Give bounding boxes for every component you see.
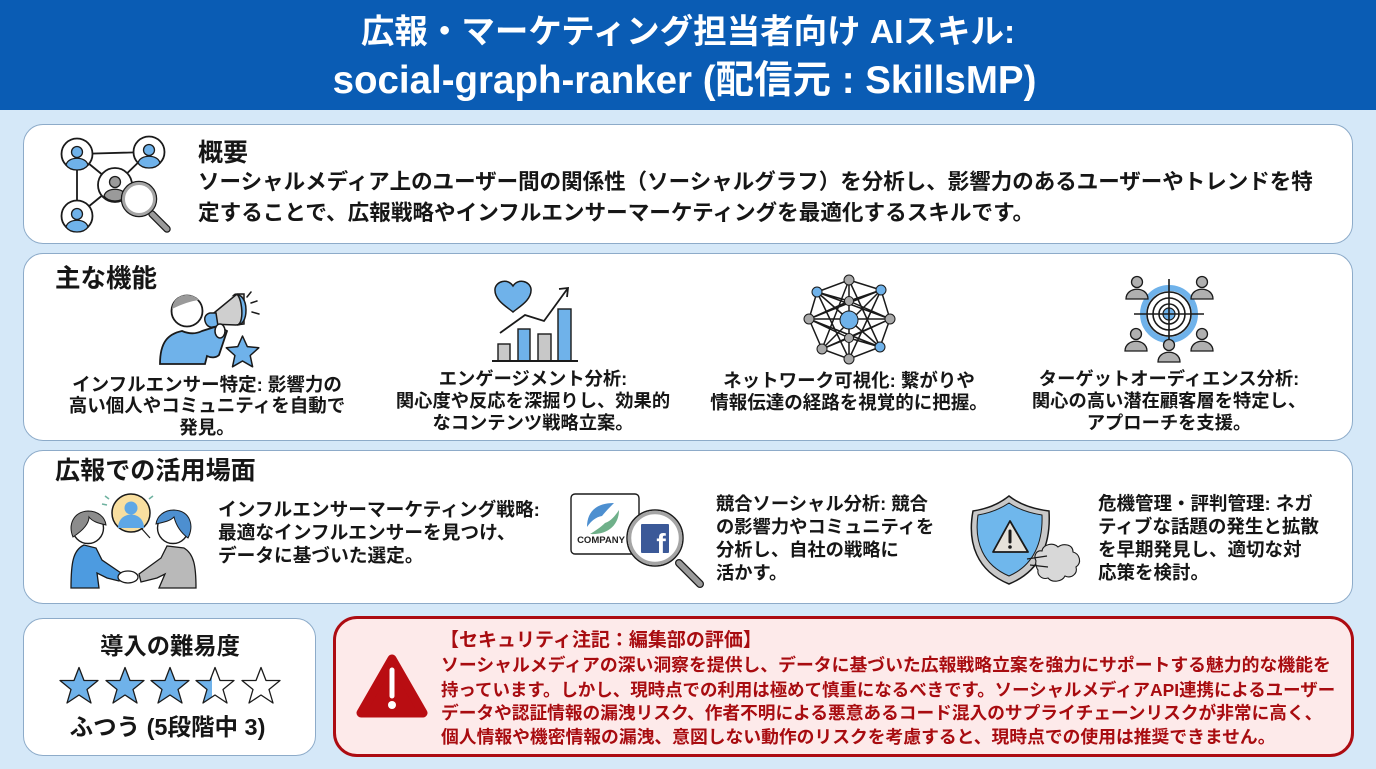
overview heading: 概要 [198, 139, 248, 167]
use case text: influencer strategy: 最適なインフルエンサーを見つけ、 [218, 522, 516, 543]
feature text: influencer identification: インフルエンサー特定: 影響力の [72, 374, 342, 395]
panel: main features [23, 253, 1353, 441]
feature text: influencer identification: 高い個人やコミュニティを自動で [69, 395, 345, 416]
difficulty heading: 導入の難易度 [100, 633, 240, 659]
use case text: influencer strategy [218, 499, 540, 566]
feature text: target audience analysis: ターゲットオーディエンス分析: [1039, 368, 1299, 389]
feature text: influencer identification [69, 374, 345, 438]
feature text: target audience analysis: 関心の高い潜在顧客層を特定し、 [1032, 390, 1306, 411]
feature text: network visualization: ネットワーク可視化: 繋がりや [723, 370, 975, 391]
warning body text: 個人情報や機密情報の漏洩、意図しない動作のリスクを考慮すると、現時点での使用は推奨できません。 [441, 727, 1275, 747]
warning heading: 【セキュリティ注記：編集部の評価】 [440, 630, 762, 651]
use case text: competitor social analysis: の影響力やコミュニティを [716, 516, 934, 537]
use case text: competitor social analysis: 活かす。 [716, 562, 787, 583]
overview text: ソーシャルメディア上のユーザー間の関係性（ソーシャルグラフ）を分析し、影響力のあるユーザーやトレンドを特 [198, 170, 1313, 194]
feature text: engagement analysis [396, 368, 670, 433]
warning body text [441, 655, 1335, 747]
icon: competitor analysis magnifier: COMPANY [577, 535, 626, 546]
warning body text: データや認証情報の漏洩リスク、作者不明による悪意あるコード混入のサプライチェーンリスクが非常に高く、 [441, 703, 1322, 723]
warning body text: 持っています。しかし、現時点での利用は極めて慎重になるべきです。ソーシャルメディアAPI連携によるユーザー [441, 680, 1335, 700]
feature text: engagement analysis: なコンテンツ戦略立案。 [432, 412, 634, 433]
feature text: target audience analysis [1032, 368, 1306, 433]
feature text: engagement analysis: 関心度や反応を深掘りし、効果的 [396, 390, 670, 411]
title line 2: social-graph-ranker (配信元 : SkillsMP) [333, 59, 1036, 102]
warning body text: ソーシャルメディアの深い洞察を提供し、データに基づいた広報戦略立案を強力にサポートする魅力的な機能を [441, 655, 1331, 675]
header banner [0, 0, 1376, 110]
icon: competitor analysis magnifier: f [656, 528, 666, 559]
use case text: crisis management: ティブな話題の発生と拡散 [1098, 516, 1319, 537]
panel: security warning [333, 616, 1354, 757]
use case text: competitor social analysis [716, 493, 934, 583]
heading: main features: 主な機能 [55, 265, 157, 293]
feature text: influencer identification: 発見。 [179, 417, 235, 438]
feature text: network visualization: 情報伝達の経路を視覚的に把握。 [710, 392, 988, 413]
heading: PR use cases: 広報での活用場面 [55, 457, 256, 485]
use case text: influencer strategy: インフルエンサーマーケティング戦略: [218, 499, 540, 520]
feature text: network visualization [710, 370, 988, 413]
use case text: crisis management [1098, 493, 1319, 583]
title line 1: 広報・マーケティング担当者向け AIスキル: [361, 14, 1015, 51]
use case text: competitor social analysis: 分析し、自社の戦略に [716, 539, 899, 560]
overview text: 定することで、広報戦略やインフルエンサーマーケティングを最適化するスキルです。 [198, 200, 1034, 225]
feature text: target audience analysis: アプローチを支援。 [1087, 412, 1251, 433]
use case text: crisis management: 応策を検討。 [1098, 562, 1209, 583]
panel: difficulty rating [23, 618, 316, 756]
difficulty label: ふつう (5段階中 3) [70, 714, 265, 740]
panel: PR use cases [23, 450, 1353, 604]
use case text: influencer strategy: データに基づいた選定。 [218, 545, 424, 566]
panel: overview [23, 124, 1353, 244]
use case text: crisis management: 危機管理・評判管理: ネガ [1098, 493, 1313, 514]
overview text [198, 170, 1313, 225]
use case text: crisis management: を早期発見し、適切な対 [1098, 539, 1302, 560]
use case text: competitor social analysis: 競合ソーシャル分析: 競合 [716, 493, 928, 514]
feature text: engagement analysis: エンゲージメント分析: [439, 368, 627, 389]
